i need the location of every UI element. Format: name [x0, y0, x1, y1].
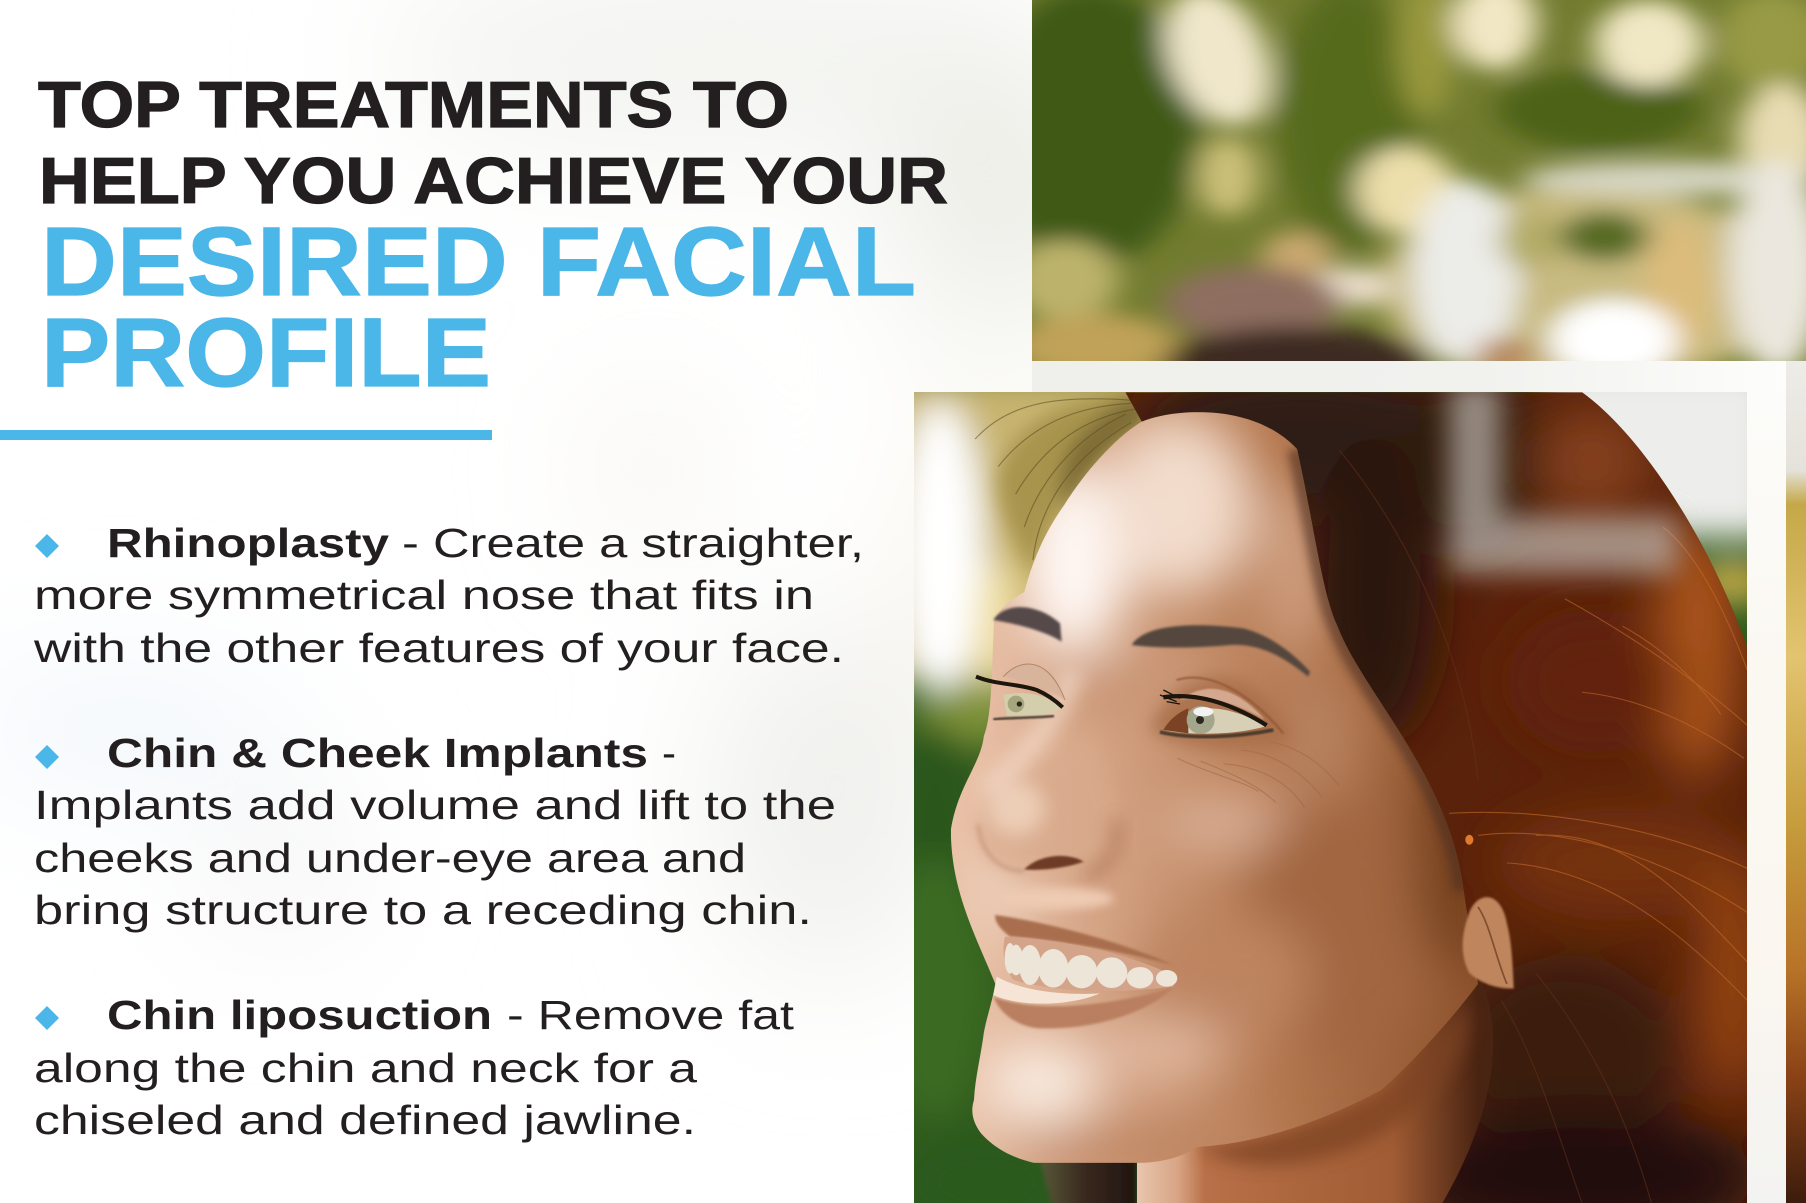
hair	[1126, 392, 1747, 1203]
rhinoplasty name: Rhinoplasty	[107, 520, 389, 566]
title line: profile: PROFILE	[41, 298, 491, 407]
title line: help you achieve your: HELP YOU ACHIEVE YOUR	[39, 144, 948, 217]
title line: top treatments to: TOP TREATMENTS TO	[38, 68, 789, 141]
page background: blurred white backdrop	[98, 0, 1032, 957]
bullet diamond	[35, 534, 59, 558]
bullet diamond	[35, 1006, 59, 1030]
rhinoplasty description line 3: with the other features of your face.	[33, 625, 844, 671]
far eye	[976, 664, 1065, 719]
liposuction description line 3: chiseled and defined jawline.	[34, 1097, 696, 1143]
neck shadow under jaw	[1197, 1006, 1468, 1165]
title line: desired facial: DESIRED FACIAL	[41, 207, 916, 316]
background photo: blurred foliage, top right	[1032, 0, 1806, 361]
ear	[1463, 835, 1514, 988]
frizzy hair at the hairline	[975, 392, 1160, 577]
photo background foliage	[914, 392, 1747, 1118]
title underline	[0, 430, 492, 440]
treatment: chin liposuction	[34, 992, 795, 1143]
implants description line 2: cheeks and under-eye area and	[34, 835, 746, 881]
treatment: rhinoplasty	[33, 520, 864, 671]
implants description line 1: Implants add volume and lift to the	[34, 782, 836, 828]
nose	[976, 670, 1119, 910]
liposuction description line 2: along the chin and neck for a	[34, 1045, 697, 1091]
white photo frame	[1032, 361, 1786, 1203]
implants dash: -	[662, 730, 676, 776]
implants description line 3: bring structure to a receding chin.	[34, 887, 812, 933]
loose hair strands	[1449, 527, 1747, 1000]
hair behind chin	[1039, 1162, 1137, 1203]
implants name: Chin & Cheek Implants	[107, 730, 648, 776]
background photo: right edge strip	[1786, 361, 1806, 1203]
near eye	[1150, 676, 1293, 749]
photo: smiling woman in profile	[914, 392, 1747, 1203]
neck	[1137, 973, 1493, 1203]
rhinoplasty description line 1: - Create a straighter,	[402, 520, 864, 566]
title	[38, 68, 948, 407]
crow's feet wrinkles	[1177, 742, 1339, 808]
bullet diamond	[35, 745, 59, 769]
liposuction name: Chin liposuction	[107, 992, 492, 1038]
rhinoplasty description line 2: more symmetrical nose that fits in	[34, 572, 814, 618]
face skin	[950, 412, 1478, 1163]
dark shading beside the hairline	[1297, 449, 1464, 890]
treatment: chin and cheek implants	[34, 730, 836, 933]
eyebrows	[993, 607, 1310, 677]
smile	[993, 915, 1177, 1028]
liposuction description line 1: - Remove fat	[507, 992, 795, 1038]
ghost frame reflection	[1449, 384, 1677, 574]
